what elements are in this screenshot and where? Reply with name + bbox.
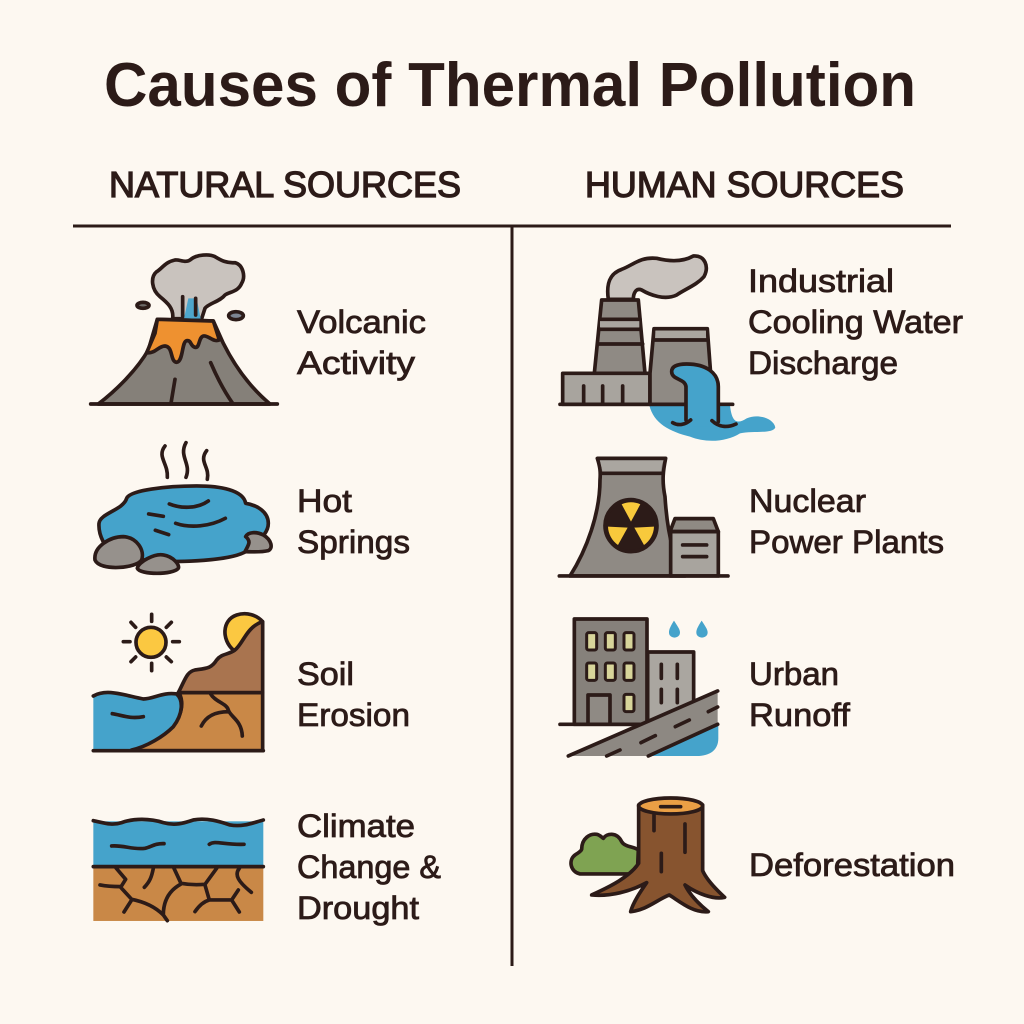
label: urban runoff: Runoff [749,697,850,733]
label: climate change and drought [297,808,441,926]
label: climate change and drought: Change & [297,849,441,885]
label: hot springs: Hot [297,483,352,519]
icon: nuclear power plant [559,458,728,576]
label: climate change and drought: Drought [297,890,419,926]
label: urban runoff: Urban [749,656,839,692]
label: urban runoff [749,656,850,733]
icon: deforestation tree stump [571,798,725,912]
icon: urban runoff [560,619,718,756]
icon: volcano [91,255,277,404]
label: nuclear power plants [749,483,944,560]
label: nuclear power plants: Nuclear [749,483,866,519]
label: industrial cooling water discharge [748,263,963,381]
label: volcanic activity [297,304,426,381]
label: volcanic activity: Volcanic [297,304,426,340]
label: industrial cooling water discharge: Cooling Water [748,304,963,340]
label: climate change and drought: Climate [297,808,415,844]
label: hot springs: Springs [297,524,410,560]
label: industrial cooling water discharge: Industrial [748,263,894,299]
label: deforestation: Deforestation [749,847,955,883]
heading: natural sources: NATURAL SOURCES [109,164,461,205]
panel: human sources [559,256,963,912]
icon: industrial cooling water discharge [560,256,775,441]
label: soil erosion: Soil [297,656,354,692]
heading: human sources: HUMAN SOURCES [585,164,904,205]
label: soil erosion: Erosion [297,697,410,733]
icon: soil erosion [93,614,263,751]
panel: natural sources [91,255,441,926]
label: soil erosion [297,656,410,733]
label: hot springs [297,483,410,560]
label: industrial cooling water discharge: Discharge [748,345,898,381]
title: Causes of Thermal Pollution [104,51,916,120]
label: nuclear power plants: Power Plants [749,524,944,560]
icon: hot spring [95,443,271,573]
icon: climate change and drought [93,819,263,921]
label: volcanic activity: Activity [297,345,415,381]
